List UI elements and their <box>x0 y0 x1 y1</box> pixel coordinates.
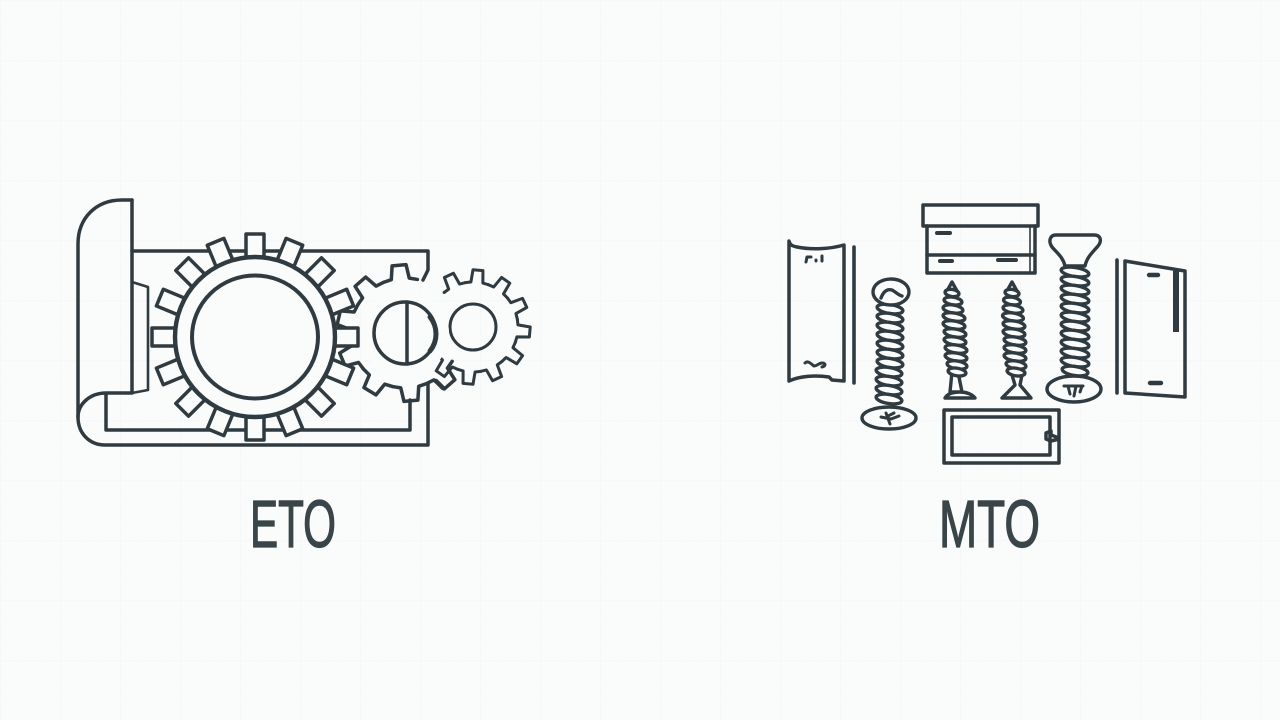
MTO label: MTO <box>939 487 1040 562</box>
ETO illustration: blueprint and gears <box>78 200 535 445</box>
right plate <box>1117 260 1185 397</box>
screw 4 <box>1047 235 1101 402</box>
ETO label: ETO <box>250 487 336 562</box>
small gear (far right) <box>430 267 535 389</box>
MTO illustration: fasteners and plates <box>789 205 1185 463</box>
large gear <box>152 234 358 440</box>
left plate <box>789 241 854 383</box>
blueprint sheet <box>78 200 428 445</box>
medium gear with slotted centre <box>329 261 464 407</box>
screw 3 <box>1002 282 1031 398</box>
bottom plate <box>944 410 1059 463</box>
stacked box <box>923 205 1038 273</box>
screw 1 <box>862 279 916 429</box>
screw 2 <box>942 282 975 398</box>
